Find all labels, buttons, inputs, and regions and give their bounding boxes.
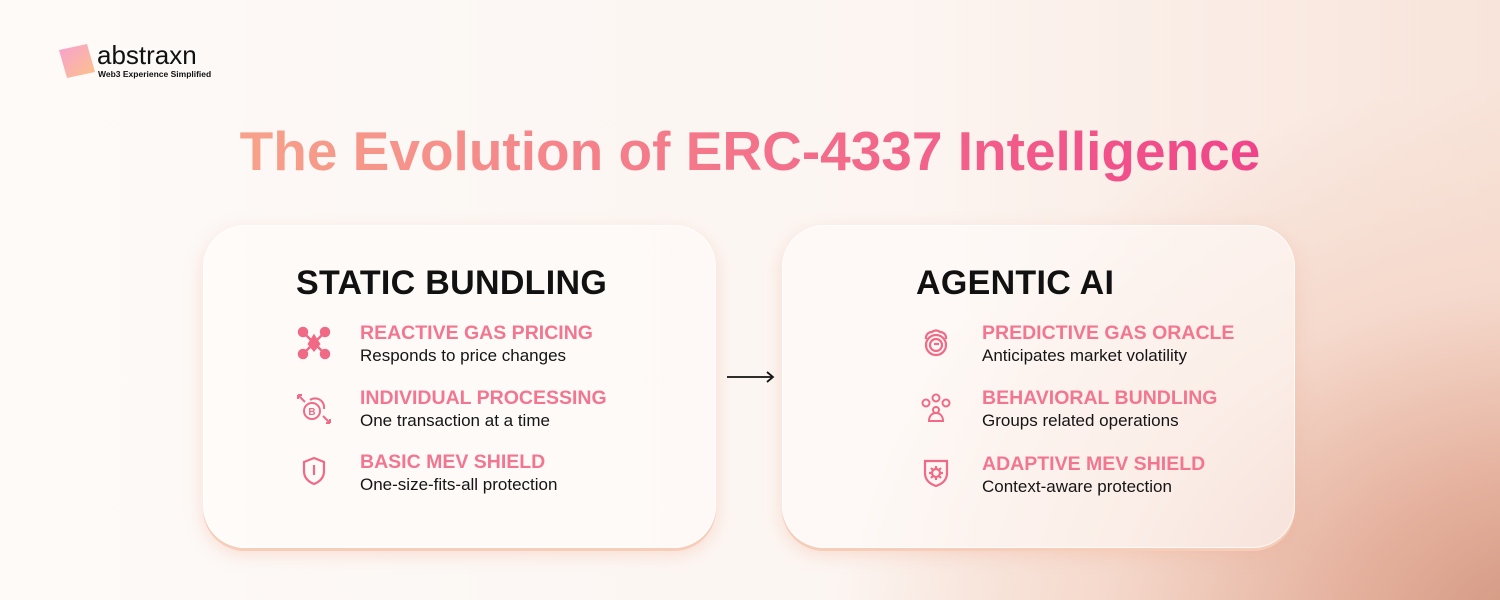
item: reactive gas pricing: REACTIVE GAS PRICING <box>360 322 593 344</box>
item: basic mev shield: BASIC MEV SHIELD <box>360 451 545 473</box>
item: predictive gas oracle <box>924 322 1234 365</box>
item: adaptive mev shield <box>924 453 1205 496</box>
item: predictive gas oracle: Anticipates market volatility <box>982 346 1187 365</box>
item: individual processing: One transaction at a time <box>360 411 550 430</box>
item: reactive gas pricing <box>298 322 593 365</box>
panel: agentic ai <box>782 225 1295 548</box>
item: basic mev shield: One-size-fits-all protection <box>360 475 557 494</box>
item: adaptive mev shield: Context-aware protection <box>982 477 1172 496</box>
item: basic mev shield <box>302 451 557 494</box>
item: individual processing: B <box>308 407 316 418</box>
item: behavioral bundling: Groups related operations <box>982 411 1179 430</box>
logo <box>59 40 211 79</box>
item: individual processing: INDIVIDUAL PROCESSING <box>360 387 607 409</box>
panel: static bundling <box>203 225 716 548</box>
item: reactive gas pricing: Responds to price changes <box>360 346 566 365</box>
item: adaptive mev shield: ADAPTIVE MEV SHIELD <box>982 453 1205 475</box>
item: behavioral bundling <box>922 387 1217 430</box>
arrow <box>727 371 774 383</box>
heading: static bundling: STATIC BUNDLING <box>296 264 607 302</box>
item: individual processing <box>297 387 607 430</box>
item: predictive gas oracle: PREDICTIVE GAS ORACLE <box>982 322 1234 344</box>
logo: abstraxn <box>97 40 197 70</box>
heading: agentic ai: AGENTIC AI <box>916 264 1114 302</box>
logo: Web3 Experience Simplified <box>98 69 211 79</box>
item: behavioral bundling: BEHAVIORAL BUNDLING <box>982 387 1217 409</box>
title: The Evolution of ERC-4337 Intelligence <box>240 120 1260 182</box>
